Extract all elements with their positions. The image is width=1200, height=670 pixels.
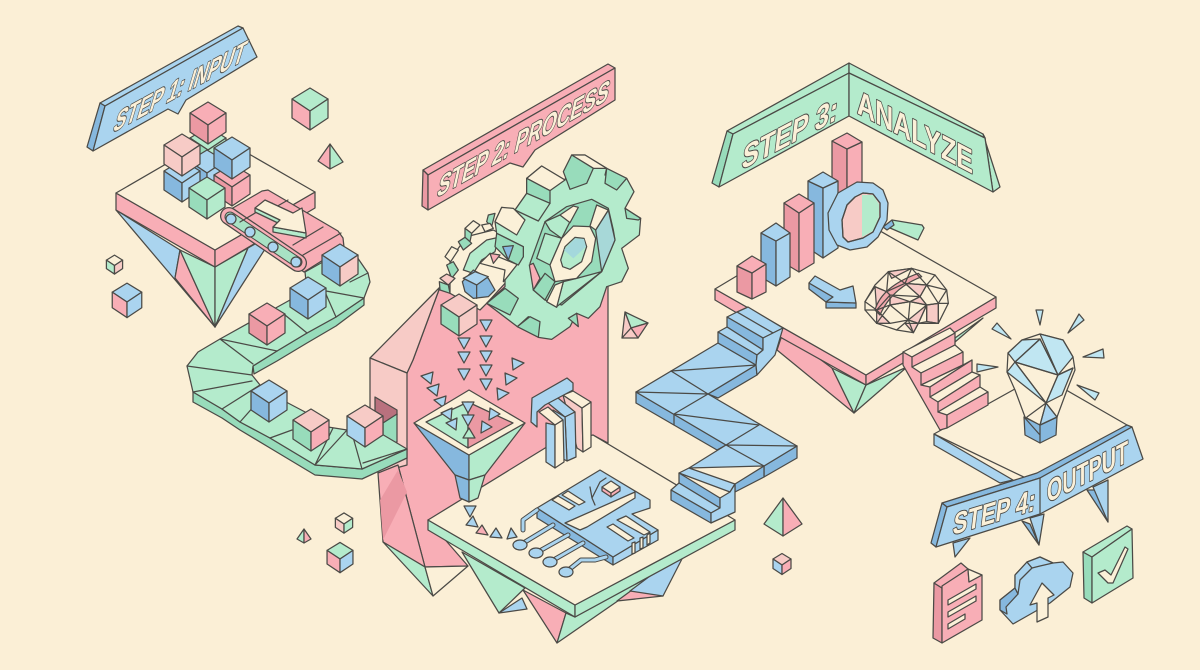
icon: light bulb — [977, 310, 1104, 443]
platform: step 4 — [934, 375, 1127, 483]
bar 5 — [832, 133, 862, 205]
small gear teeth — [439, 213, 495, 293]
cube: mint front — [189, 177, 225, 219]
icon: geometric brain — [865, 268, 948, 333]
cube in small gear — [463, 272, 488, 298]
gear bore — [530, 199, 615, 305]
platform: step 1 — [116, 135, 315, 327]
banner: step 4 — [931, 425, 1143, 557]
cube: blue lower left — [164, 160, 200, 202]
gear spokes — [560, 206, 578, 223]
cube: pink top — [190, 102, 226, 144]
cube above the funnel — [441, 294, 477, 336]
cube: small blue middle — [189, 150, 225, 192]
bar 1 — [737, 256, 766, 299]
bar chart — [737, 133, 862, 299]
platform: step 2 — [428, 435, 735, 643]
conveyor belt — [226, 190, 344, 272]
input cubes stack — [164, 102, 250, 219]
banner: step 1 — [87, 26, 257, 151]
bar 4 — [808, 172, 838, 258]
big gear — [487, 155, 641, 339]
icon: conveyor arrow — [255, 200, 306, 238]
pink staircase — [903, 328, 988, 430]
light rays — [977, 310, 1104, 400]
banner: step 3: STEP 3: — [740, 90, 840, 178]
icon: circuit board — [513, 470, 658, 577]
particle trail on platform — [464, 506, 517, 539]
icon: document — [933, 563, 982, 643]
banner: step 4: OUTPUT — [1047, 434, 1128, 510]
octahedron — [622, 312, 648, 338]
cubes on the path — [249, 244, 383, 451]
cube: blue upper right — [214, 137, 250, 179]
icon: check box — [1083, 526, 1133, 603]
pyramid — [764, 498, 802, 536]
arrow to the brain — [809, 276, 856, 308]
banner: step 3 — [712, 63, 1000, 192]
banner: step 1: STEP 1: INPUT — [110, 33, 251, 140]
tower: central pink wall — [370, 270, 608, 596]
banner: step 3: ANALYZE — [857, 83, 973, 182]
blue zigzag staircase — [636, 307, 797, 523]
floating shapes near the tower — [297, 312, 802, 574]
winding mint conveyor path — [187, 257, 407, 479]
upper steps — [718, 307, 783, 375]
cube: pink lower right — [214, 164, 250, 206]
floating shapes upper left — [106, 88, 343, 318]
cube: mint back — [190, 127, 226, 169]
small gear — [439, 213, 523, 310]
tooth faces — [487, 155, 641, 337]
icon: server columns — [531, 378, 591, 468]
gears — [439, 155, 641, 339]
pins — [513, 510, 606, 577]
funnel — [414, 390, 525, 502]
bar 2 — [761, 223, 790, 286]
banner: step 2 — [422, 64, 615, 210]
icon: magnifying glass — [828, 182, 924, 250]
bar 3 — [784, 194, 814, 272]
banner: step 2: STEP 2: PROCESS — [434, 72, 613, 205]
chip — [602, 481, 620, 497]
icon: cloud upload — [1000, 557, 1073, 624]
lower steps — [671, 468, 735, 523]
banner: step 4: STEP 4: — [951, 482, 1038, 542]
platform: step 3 — [715, 211, 996, 413]
gear hub — [550, 226, 596, 282]
cube: light pink — [164, 134, 200, 176]
floating particles stream — [421, 320, 524, 408]
